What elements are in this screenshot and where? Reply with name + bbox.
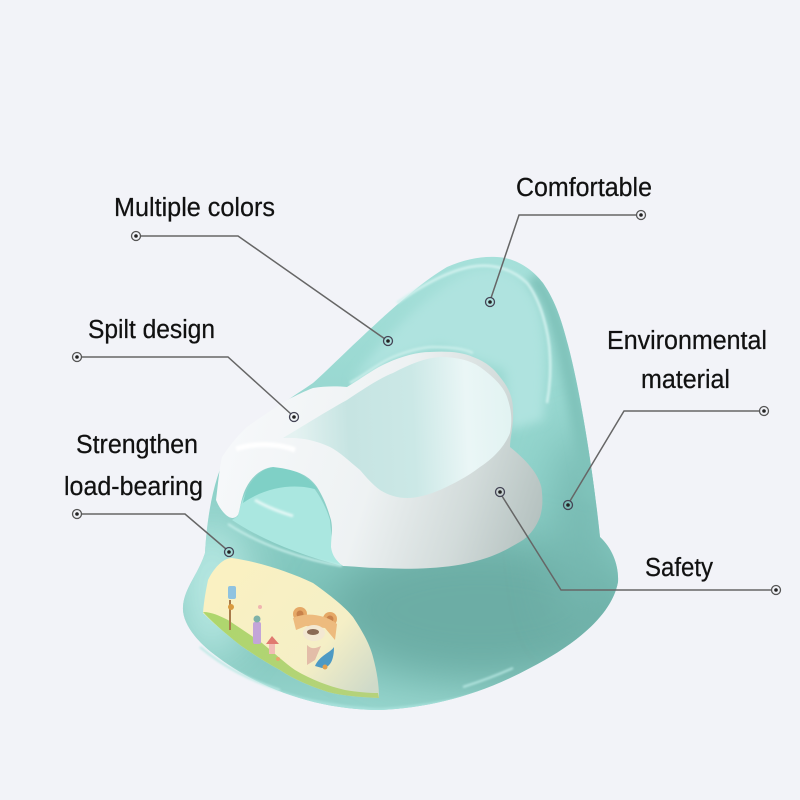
callout: Environmental material bbox=[564, 327, 768, 510]
decal bear bbox=[293, 607, 337, 670]
callout: Strengthen load-bearing bbox=[64, 431, 234, 556]
callout: Environmental material: Environmental bbox=[607, 327, 767, 355]
callout: Safety bbox=[496, 488, 780, 594]
decal houses bbox=[228, 586, 280, 661]
arch inner highlight bbox=[255, 500, 293, 516]
decal grass bbox=[203, 612, 379, 698]
callout: Multiple colors: Multiple colors bbox=[114, 194, 275, 222]
arch opening bbox=[232, 467, 342, 566]
arch shadow band bbox=[243, 467, 318, 503]
seat ridge line bbox=[350, 347, 473, 383]
callout: Strengthen load-bearing: load-bearing bbox=[64, 473, 203, 501]
seat bbox=[216, 352, 542, 569]
callout: Safety: Safety bbox=[645, 554, 713, 582]
decal background bbox=[203, 558, 379, 698]
base rim highlight bbox=[200, 647, 513, 690]
callout: Strengthen load-bearing: Strengthen bbox=[76, 431, 198, 459]
seat front highlight bbox=[236, 445, 295, 450]
decal bbox=[203, 558, 379, 698]
callout: Multiple colors bbox=[114, 194, 392, 346]
seat basin bbox=[283, 357, 511, 498]
callout: Comfortable: Comfortable bbox=[516, 174, 652, 202]
callout: Comfortable bbox=[486, 174, 652, 306]
callout: Spilt design bbox=[72, 316, 298, 422]
base ledge line bbox=[228, 524, 342, 566]
body shading bbox=[174, 269, 630, 720]
callout: Spilt design: Spilt design bbox=[88, 316, 215, 344]
illustration: potty chair bbox=[174, 257, 630, 720]
potty body shell bbox=[183, 257, 618, 710]
backrest highlight bbox=[397, 266, 550, 403]
callout: Environmental material: material bbox=[641, 366, 730, 394]
